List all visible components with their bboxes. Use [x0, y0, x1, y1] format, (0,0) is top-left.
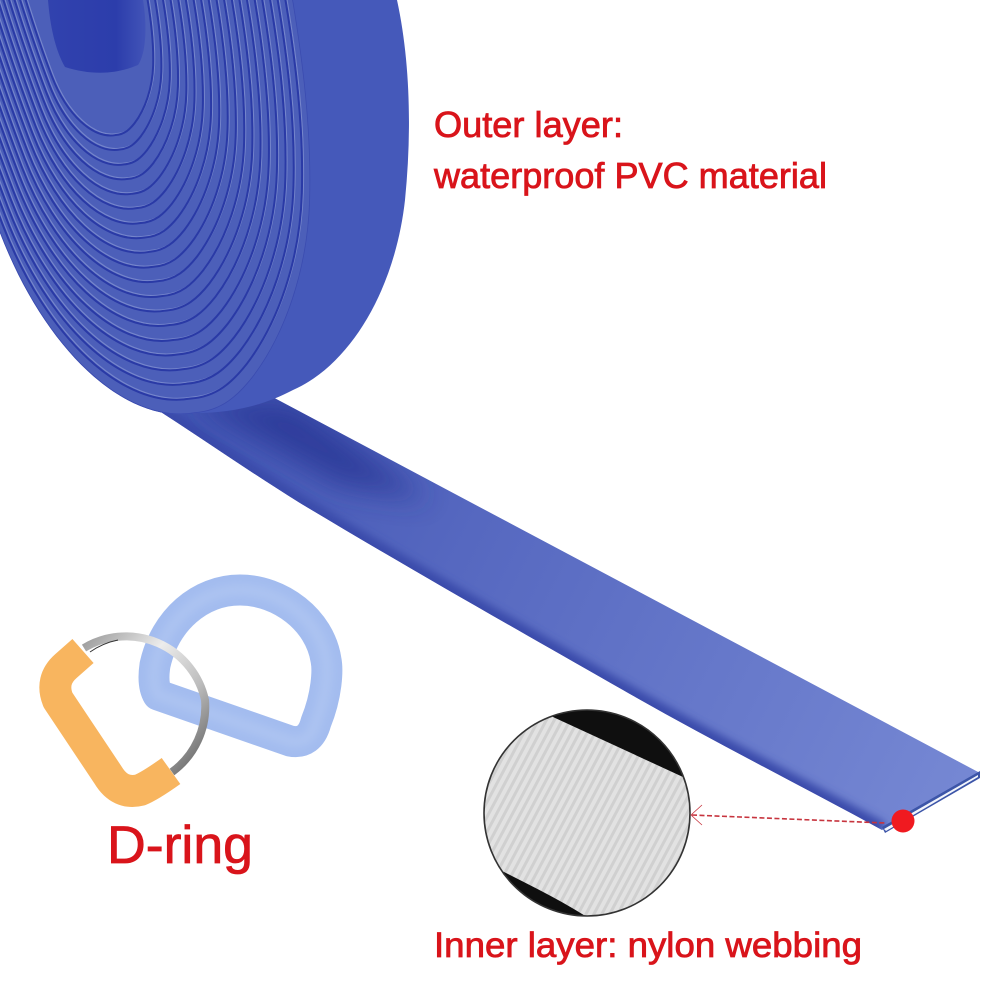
D-ring: orange ring	[55, 651, 171, 791]
coil spiral face	[0, 0, 319, 419]
label: outer layer	[433, 104, 827, 196]
dashed pointer arrow	[691, 805, 885, 825]
D-ring: blue ring	[154, 590, 327, 742]
label: outer layer: waterproof PVC material	[433, 155, 827, 196]
label: D-ring: D-ring	[107, 816, 253, 875]
black corner bottom	[503, 872, 584, 916]
coil centre hole	[48, 0, 145, 73]
coil side band	[0, 0, 409, 413]
label: outer layer: Outer layer:	[434, 104, 623, 145]
red marker dot	[892, 810, 914, 832]
magnified nylon webbing circle	[483, 709, 691, 917]
strip cut end showing layers	[882, 771, 980, 833]
coil of webbing	[0, 0, 409, 419]
D-ring: metal split ring	[84, 636, 205, 772]
label: inner layer: Inner layer: nylon webbing	[434, 926, 862, 965]
flat webbing strip	[162, 398, 980, 833]
black corner top	[552, 710, 682, 777]
